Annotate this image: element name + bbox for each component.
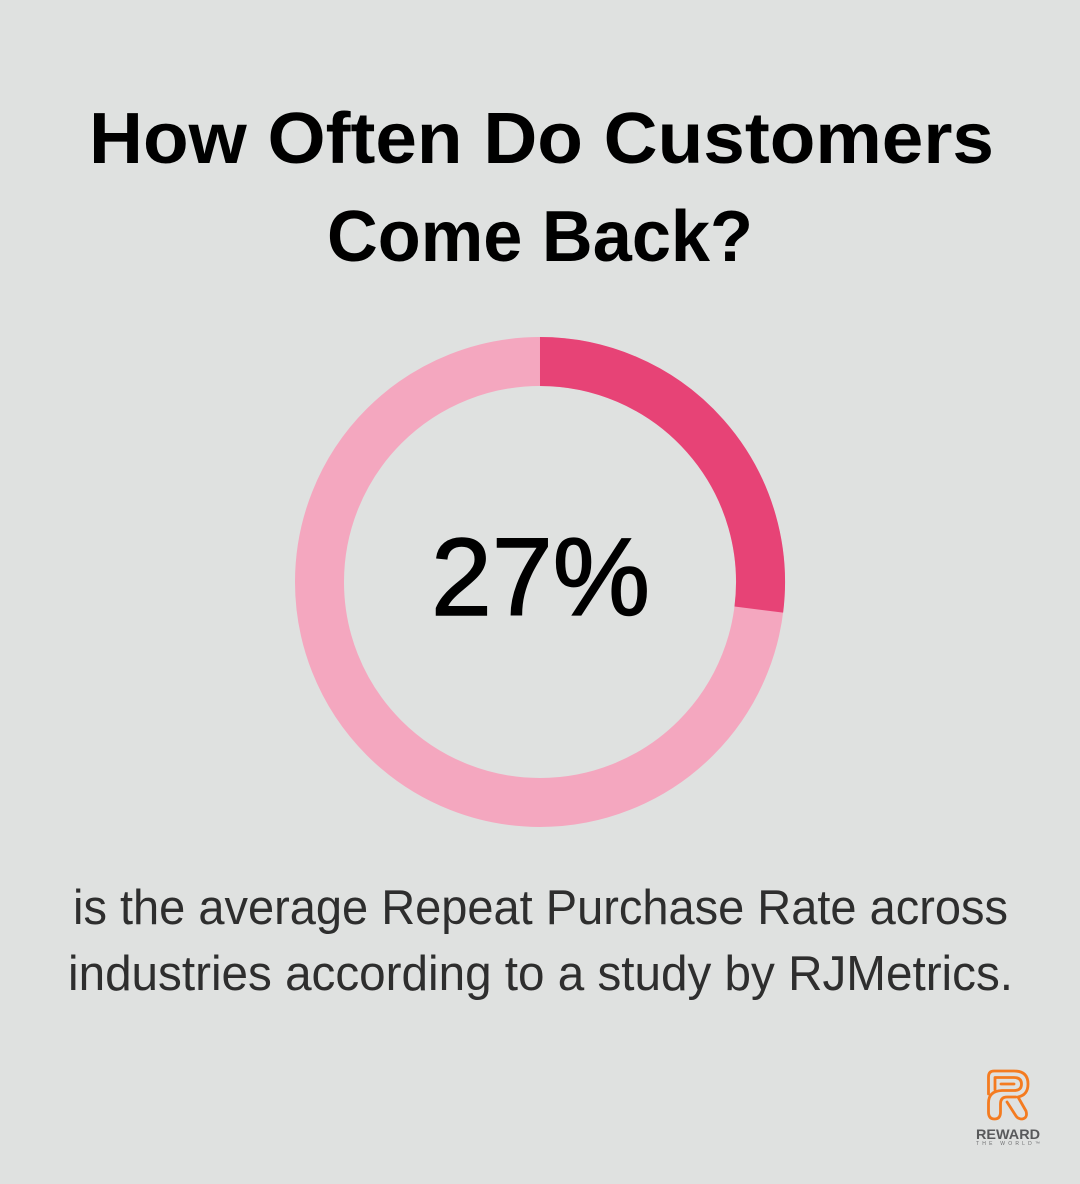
logo tagline: THE WORLD™: [976, 1141, 1040, 1147]
big number: 27%: [431, 516, 650, 639]
description text: industries according to a study by RJMetrics.: [68, 947, 1013, 1001]
description text: [68, 881, 1013, 1001]
title: [89, 99, 994, 277]
icon: orange R mark: [988, 1071, 1028, 1119]
title: How Often Do Customers: [89, 99, 994, 179]
donut highlighted segment: [540, 362, 761, 610]
logo: Reward the World: [976, 1071, 1040, 1147]
title: Come Back?: [327, 197, 753, 277]
logo wordmark: REWARD: [976, 1126, 1040, 1142]
donut chart: 27%: [320, 362, 761, 802]
description text: is the average Repeat Purchase Rate across: [73, 881, 1008, 935]
donut track: [320, 362, 760, 802]
